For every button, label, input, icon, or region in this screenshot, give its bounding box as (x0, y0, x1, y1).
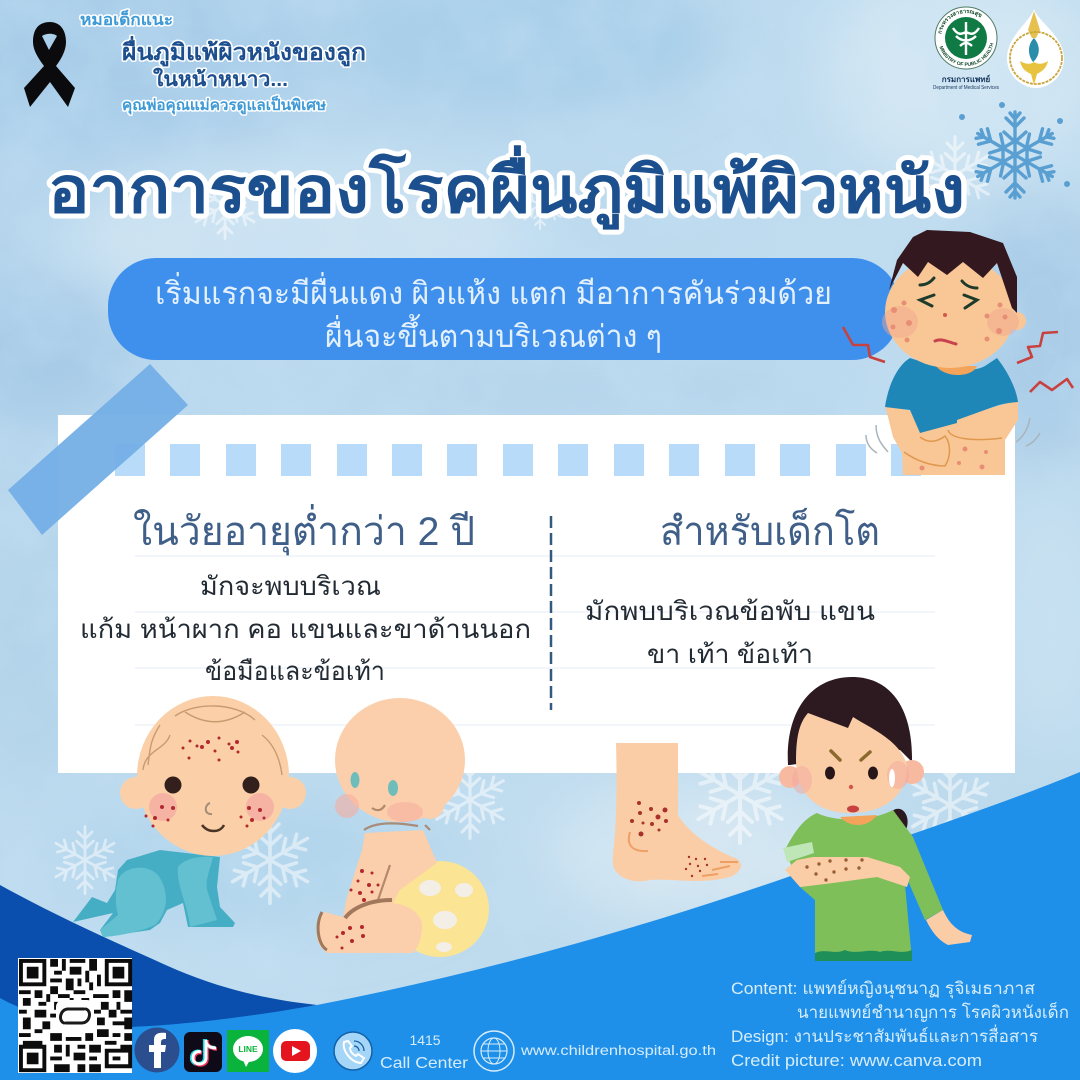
body left line 3: ข้อมือและข้อเท้า (205, 656, 385, 686)
illustration: crawling baby (73, 696, 306, 937)
credit line 3: Design: งานประชาสัมพันธ์และการสื่อสาร (731, 1024, 1038, 1046)
header: topic line: ผื่นภูมิแพ้ผิวหนังของลูก (121, 35, 366, 67)
callout line 1: เริ่มแรกจะมีผื่นแดง ผิวแห้ง แตก มีอาการคันร่วมด้วย (155, 272, 832, 311)
body right line 1: มักพบบริเวณข้อพับ แขน (585, 596, 875, 626)
logo: Ministry of Public Health: กรมการแพทย์ (942, 74, 991, 84)
washi tape (8, 364, 188, 535)
QR code (18, 958, 132, 1073)
left column: under 2 years (80, 504, 531, 686)
crawling baby hair lines (143, 706, 282, 775)
notebook holes row (115, 444, 921, 476)
girl bent arm (785, 857, 910, 887)
crawling baby head (137, 696, 289, 856)
girl sweat drop (889, 769, 895, 787)
snowflake decorations (52, 137, 993, 903)
illustration: sitting baby (317, 698, 489, 957)
call center text: 1415 (410, 1032, 441, 1048)
boy arms and belly (885, 400, 1018, 475)
diaper (391, 861, 489, 957)
heading left: ในวัยอายุต่ำกว่า 2 ปี (133, 504, 475, 556)
crawling baby thigh (100, 868, 166, 937)
girl collar (840, 815, 877, 825)
icon: LINE (227, 1030, 269, 1072)
crawling baby ears (120, 777, 152, 809)
QR centre logo (56, 1000, 94, 1032)
boy shirt (885, 358, 1018, 433)
sitting baby lines (318, 805, 430, 950)
girl cheeks (792, 761, 909, 794)
panel: white notebook paper (58, 415, 1015, 773)
girl shirt (785, 810, 912, 960)
girl face (796, 713, 907, 813)
itch marks (843, 327, 1073, 392)
logo: Ministry of Public Health (933, 6, 999, 91)
sitting baby head (335, 698, 465, 822)
boy cheeks (882, 306, 1019, 338)
boy rash (890, 300, 1008, 470)
header: doctor advises: หมอเด็กแนะ (80, 8, 173, 29)
illustration: foot with rash (613, 743, 741, 881)
girl shirt hem (815, 950, 912, 961)
logo: children's hospital gold (1007, 9, 1064, 88)
sitting baby rash (336, 869, 380, 950)
icon: tiktok (184, 1032, 222, 1072)
girl arm rash (805, 858, 864, 882)
girl ears (779, 766, 801, 788)
header: winter line: ในหน้าหนาว... (153, 67, 288, 91)
boy ear (1008, 312, 1026, 330)
girl bandage (783, 842, 814, 862)
call center text (380, 1032, 469, 1072)
icon: globe (474, 1031, 514, 1071)
icon: facebook (134, 1028, 180, 1072)
header: parents line: คุณพ่อคุณแม่ควรดูแลเป็นพิเศษ (122, 95, 326, 115)
boy face (920, 278, 977, 344)
callout line 2: ผื่นจะขึ้นตามบริเวณต่าง ๆ (325, 314, 662, 354)
heading right: สำหรับเด็กโต (660, 507, 880, 554)
icon: LINE: LINE (238, 1044, 258, 1054)
body left line 2: แก้ม หน้าผาก คอ แขนและขาด้านนอก (80, 614, 531, 644)
icon: phone (334, 1032, 372, 1070)
girl features (831, 751, 870, 760)
sitting baby ear (416, 791, 444, 819)
icon: YouTube (273, 1029, 317, 1073)
vertical dashed divider (550, 516, 552, 710)
diaper pattern (419, 880, 473, 952)
boy head (885, 256, 1015, 368)
crawling baby body (73, 850, 235, 937)
credits block (731, 979, 1069, 1070)
logo: Ministry of Public Health: Department of Medical Services (933, 85, 999, 91)
crawling baby eyes (164, 776, 260, 794)
website: www.childrenhospital.go.th (520, 1043, 716, 1058)
foot creases (629, 832, 738, 876)
crawling baby nose and mouth (206, 803, 212, 814)
crawling baby cheeks (149, 793, 274, 821)
foot rash (630, 801, 708, 877)
body left line 1: มักจะพบบริเวณ (200, 571, 381, 601)
credit line 4: Credit picture: www.canva.com (731, 1051, 982, 1070)
scratch motion lines (866, 418, 1040, 453)
boy collar (936, 366, 977, 375)
black mourning ribbon (24, 22, 75, 107)
sitting baby torso and leg (317, 830, 437, 953)
illustration: girl with arm rash (779, 677, 972, 961)
sitting baby cheeks (335, 794, 423, 822)
title: อาการของโรคผื่นภูมิแพ้ผิวหนัง (48, 145, 965, 230)
illustration: itchy boy (843, 230, 1073, 475)
call center text: Call Center (380, 1055, 469, 1072)
icon: blue snowflake (959, 102, 1070, 198)
crawling baby rash (144, 736, 266, 828)
boy hair (889, 230, 1017, 313)
crawling baby arm (178, 857, 217, 927)
girl ponytail (888, 809, 908, 830)
sitting baby eyes (350, 772, 398, 796)
credit line 2: นายแพทย์ชำนาญการ โรคผิวหนังเด็ก (797, 1001, 1069, 1022)
girl far arm (893, 810, 943, 920)
header text block (80, 8, 366, 115)
credit line 1: Content: แพทย์หญิงนุชนาฏ รุจิเมธาภาส (731, 979, 1036, 999)
bottom blue waves (0, 772, 1080, 1080)
logo: Ministry of Public Health: กระทรวงสาธารณสุข (938, 10, 982, 34)
right column: older children (585, 507, 880, 669)
logo: Ministry of Public Health: MINISTRY OF PUBLIC HEALTH (940, 42, 994, 66)
body right line 2: ขา เท้า ข้อเท้า (647, 639, 813, 669)
callout pill (108, 258, 900, 360)
girl hair back (788, 677, 912, 765)
